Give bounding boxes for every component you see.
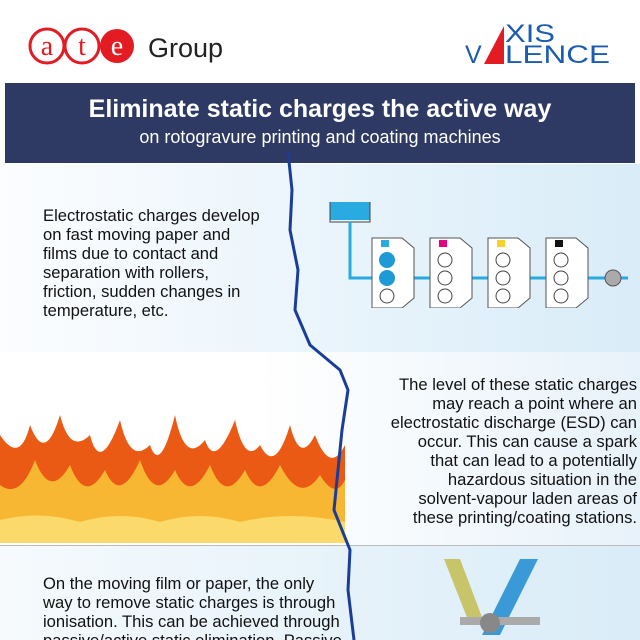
title banner: on rotogravure printing and coating machines — [139, 127, 501, 147]
logo: axis valence: LENCE — [505, 41, 610, 69]
text block 3: On the moving film or paper, the only — [43, 574, 314, 593]
illustration: ioniser web — [444, 559, 540, 635]
section 1 background — [0, 164, 640, 352]
title banner — [5, 83, 635, 163]
text block 2: that can lead to a potentially — [430, 451, 637, 470]
text block 2: may reach a point where an — [432, 394, 637, 413]
logo: ate group — [28, 28, 223, 64]
text block 1: friction, sudden changes in — [43, 282, 240, 301]
logo: ate group: Group — [148, 33, 223, 63]
flames illustration — [0, 415, 345, 543]
text block 2: solvent-vapour laden areas of — [418, 489, 637, 508]
text block 1: separation with rollers, — [43, 263, 209, 282]
text block 3 — [43, 574, 342, 640]
section 2 background — [0, 352, 640, 545]
title banner: Eliminate static charges the active way — [89, 95, 551, 123]
logo: axis valence — [465, 20, 610, 69]
logo: axis valence: V — [465, 41, 482, 69]
text block 3: ionisation. This can be achieved through — [43, 612, 340, 631]
text block 3: way to remove static charges is through — [43, 593, 335, 612]
logo: axis valence: XIS — [505, 20, 555, 48]
diagram: printing stations — [330, 202, 628, 308]
text block 1: Electrostatic charges develop — [43, 206, 260, 225]
text block 2: electrostatic discharge (ESD) can — [391, 413, 637, 432]
text block 2 — [391, 375, 637, 527]
logo: ate group: t — [78, 31, 86, 62]
text block 1: on fast moving paper and — [43, 225, 230, 244]
text block 1: films due to contact and — [43, 244, 218, 263]
section 3 background — [0, 545, 640, 640]
text block 1: temperature, etc. — [43, 301, 168, 320]
logo: ate group: e — [111, 31, 123, 62]
logo: ate group: a — [41, 31, 54, 62]
text block 2: hazardous situation in the — [448, 470, 637, 489]
text block 1 — [43, 206, 260, 320]
lightning line — [286, 152, 356, 640]
text block 2: these printing/coating stations. — [413, 508, 637, 527]
text block 2: The level of these static charges — [399, 375, 637, 394]
text block 2: occur. This can cause a spark — [418, 432, 637, 451]
